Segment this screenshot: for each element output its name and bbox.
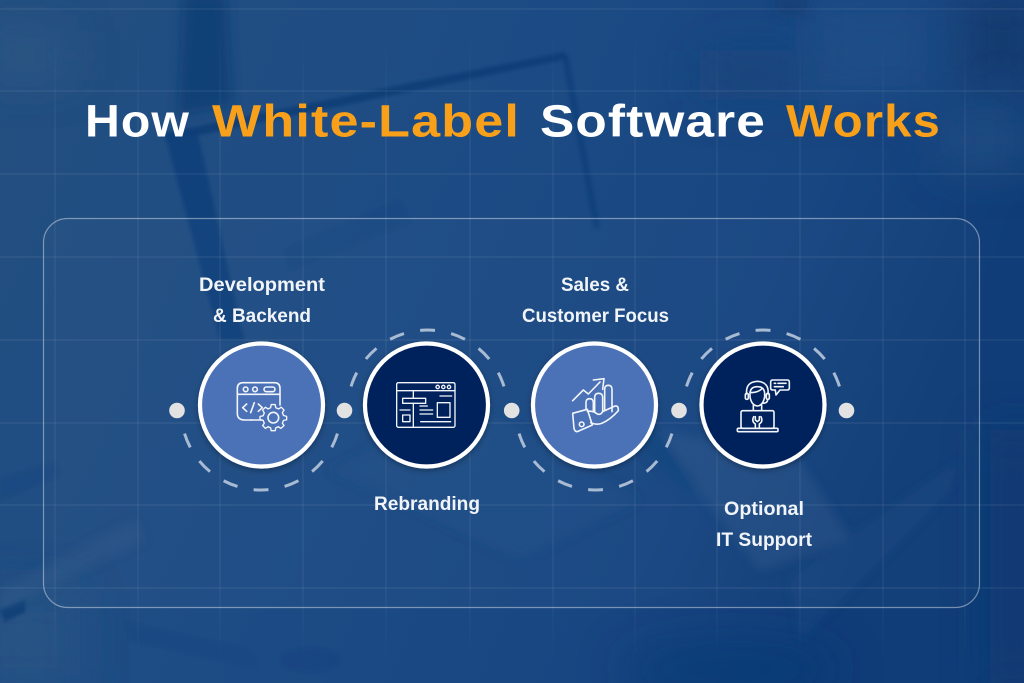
step 3 circle [533,344,656,466]
title: White-Label [212,96,520,146]
icon: hand with growth chart [573,379,618,432]
step 3 label: Sales & [561,275,629,296]
step 2 circle [365,344,488,466]
title [85,96,941,146]
icon: support agent with headset [737,380,789,432]
step 4 label [716,499,813,551]
step 4 label: IT Support [716,530,813,551]
title: How [85,96,190,146]
dashed arcs [185,330,839,490]
panel: process steps [44,218,980,608]
title: Works [786,96,941,146]
step 4 circle [702,344,824,466]
connector dots [169,403,854,418]
step 1 label [199,275,326,327]
step 1 label: Development [199,275,326,296]
icon: code window with gear [237,383,287,431]
step 2 label: Rebranding [374,494,480,515]
icon: rebranding layout window [397,383,455,427]
step 3 label [522,275,669,327]
step 1 circle [200,344,323,466]
step 1 label: & Backend [213,306,311,327]
title: Software [540,96,766,146]
step 3 label: Customer Focus [522,306,669,327]
step 4 label: Optional [724,499,804,520]
